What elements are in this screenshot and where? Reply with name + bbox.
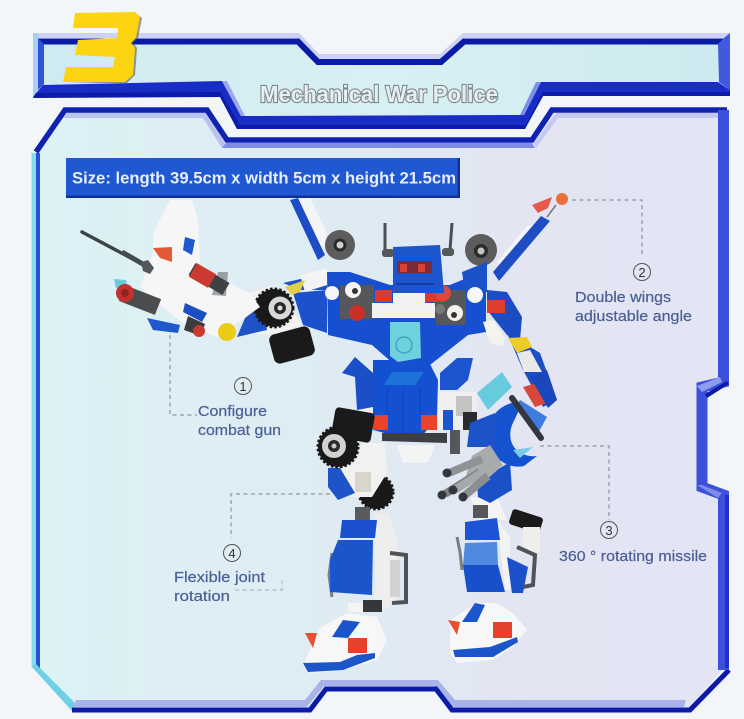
- callout 2: double wings adjustable angle: 2: [638, 265, 646, 280]
- callout 3: 360 rotating missile: [540, 446, 707, 565]
- callout 1: configure combat gun: [170, 335, 281, 439]
- left thigh and wheel: [318, 407, 393, 509]
- robot figure: [82, 193, 568, 673]
- callout 4: flexible joint rotation: [174, 494, 330, 605]
- left arm: [237, 268, 327, 365]
- callout 4: flexible joint rotation: Flexible joint: [174, 570, 265, 586]
- callout 2: double wings adjustable angle: Double wings: [575, 290, 671, 306]
- callout 3: 360 rotating missile: 3: [605, 523, 613, 538]
- gatling missile: [438, 413, 512, 503]
- panel: main frame: [31, 110, 729, 711]
- panel: header frame: [33, 33, 730, 129]
- icon: yellow number 3: [63, 12, 142, 83]
- right foot: [448, 603, 527, 663]
- left foot: [303, 613, 387, 673]
- callout 4: flexible joint rotation: rotation: [174, 589, 230, 605]
- right wheel and thigh: [470, 497, 544, 552]
- left back wing: [290, 198, 355, 260]
- title: Mechanical War Police: [260, 81, 498, 107]
- callout 1: configure combat gun: combat gun: [198, 423, 281, 439]
- size banner: [66, 158, 460, 198]
- callout 2: double wings adjustable angle: [572, 200, 692, 325]
- callout 1: configure combat gun: 1: [239, 379, 247, 394]
- head: [382, 223, 454, 303]
- right back wing: [465, 193, 568, 281]
- size banner: Size: length 39.5cm x width 5cm x height 21.5cm: [72, 170, 456, 188]
- callout 3: 360 rotating missile: 360 ° rotating missile: [559, 549, 707, 565]
- shield: [488, 398, 547, 467]
- combat gun: [82, 200, 260, 341]
- callout 2: double wings adjustable angle: adjustable angle: [575, 309, 692, 325]
- right leg: [457, 505, 535, 593]
- left leg: [329, 507, 406, 612]
- abdomen and hips: [342, 357, 477, 463]
- callout 4: flexible joint rotation: 4: [228, 546, 236, 561]
- callout 1: configure combat gun: Configure: [198, 404, 267, 420]
- torso: [325, 262, 487, 365]
- right arm: [477, 290, 557, 410]
